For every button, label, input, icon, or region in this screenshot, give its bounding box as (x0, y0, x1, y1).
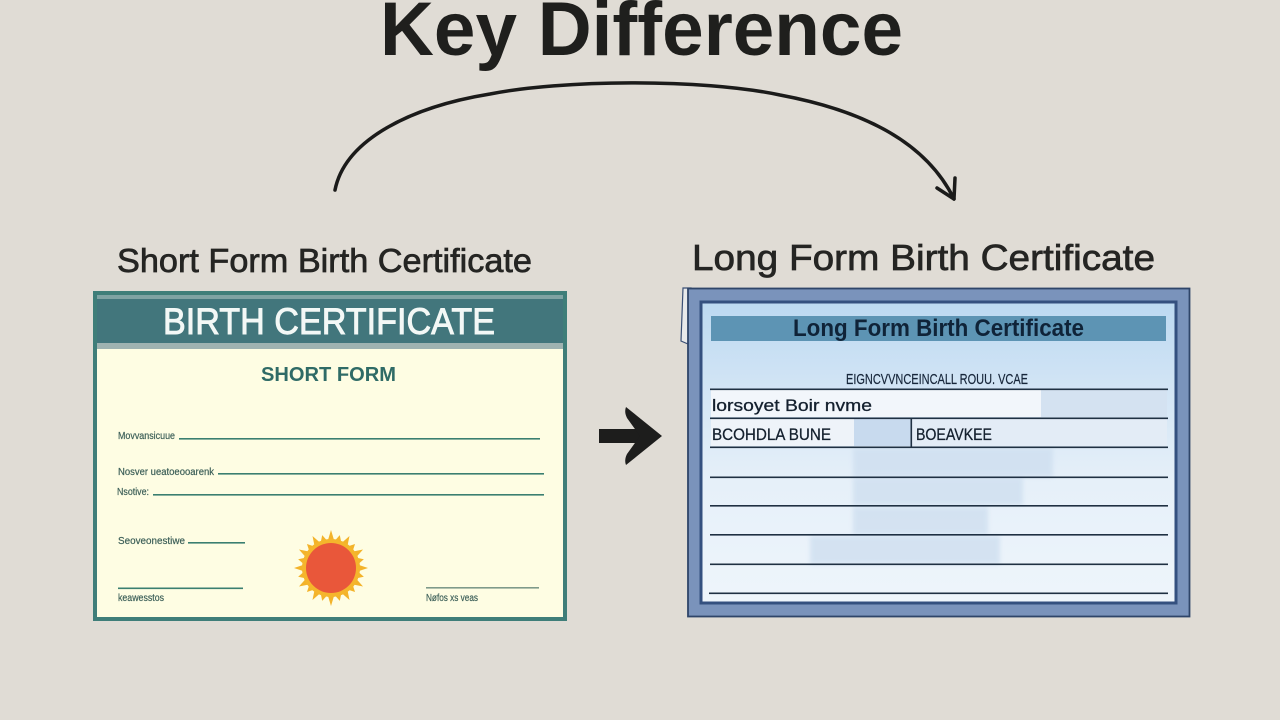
arrow: right pointing arrow between certificates (599, 407, 662, 465)
paper shading blocks (810, 448, 1053, 564)
form field: line 2: Nosver ueatoeooarenk (118, 467, 215, 478)
certificate paper and border (95, 293, 565, 619)
table text: row 2 right: BOEAVKEE (916, 425, 992, 444)
panel: short form certificate (95, 293, 565, 619)
form field: line 3: Nsotive: (117, 487, 149, 498)
signature right: Nøfos xs veas (426, 593, 478, 604)
form field: line 1: Movvansicuue (118, 431, 175, 442)
form field: line 4 (118, 536, 245, 547)
signature right (426, 587, 539, 604)
form field: line 4: Seoveonestiwe (118, 536, 185, 547)
heading: long form: Long Form Birth Certificate (692, 237, 1155, 278)
icon: sun seal (294, 530, 368, 606)
table text: row 1: lorsoyet Boir nvme (712, 396, 872, 415)
arrow: curved arrow from short form to long form (335, 83, 955, 199)
certificate header band: BIRTH CERTIFICATE (163, 301, 495, 342)
table rules (709, 388, 1168, 594)
panel: long form certificate (681, 288, 1190, 616)
header band (711, 315, 1166, 342)
highlighted row (711, 390, 1041, 417)
small heading: EIGNCVVNCEINCALL ROUU. VCAE (846, 371, 1028, 388)
icon: folded tab (681, 288, 691, 344)
heading: short form: Short Form Birth Certificate (117, 242, 532, 279)
inner paper (701, 302, 1176, 603)
certificate header band (97, 295, 563, 349)
header band: Long Form Birth Certificate (793, 315, 1084, 342)
signature left (118, 588, 243, 604)
subtitle: short form: SHORT FORM (261, 364, 396, 386)
table text: row 2 left: BCOHDLA BUNE (712, 425, 831, 444)
signature left: keawesstos (118, 593, 164, 604)
outer frame (688, 288, 1190, 616)
